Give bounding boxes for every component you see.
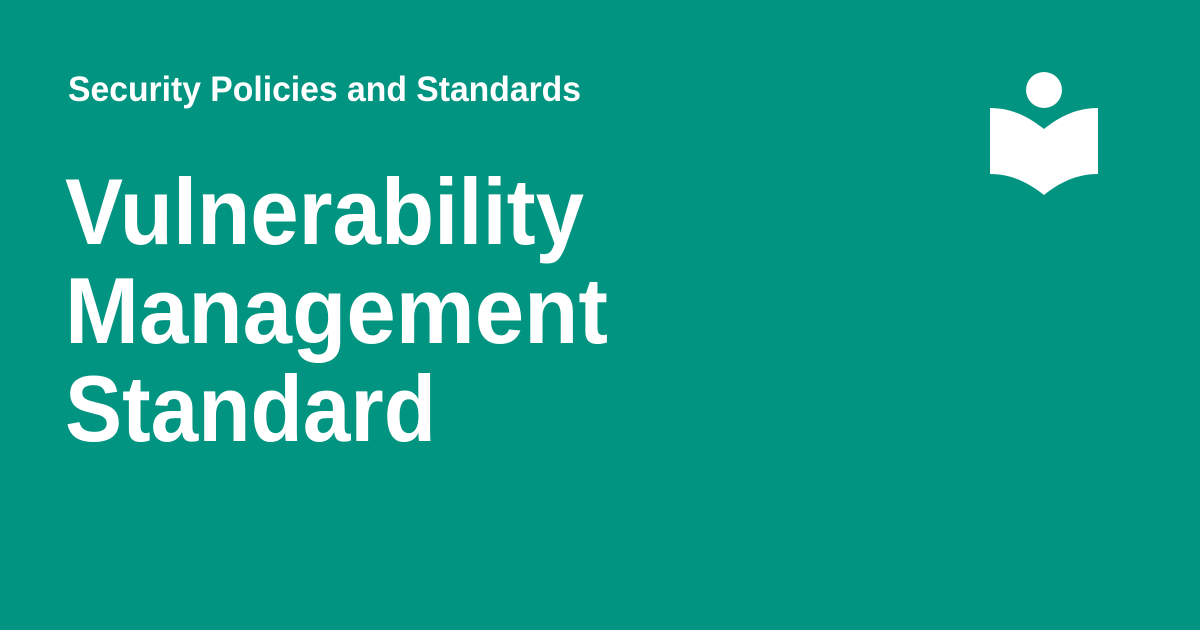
category heading: Security Policies and Standards — [68, 70, 581, 109]
icon: reader with open book — [990, 72, 1098, 195]
main title: Management — [65, 258, 608, 363]
main title — [65, 159, 608, 461]
main title: Vulnerability — [65, 159, 584, 264]
main title: Standard — [65, 356, 436, 461]
